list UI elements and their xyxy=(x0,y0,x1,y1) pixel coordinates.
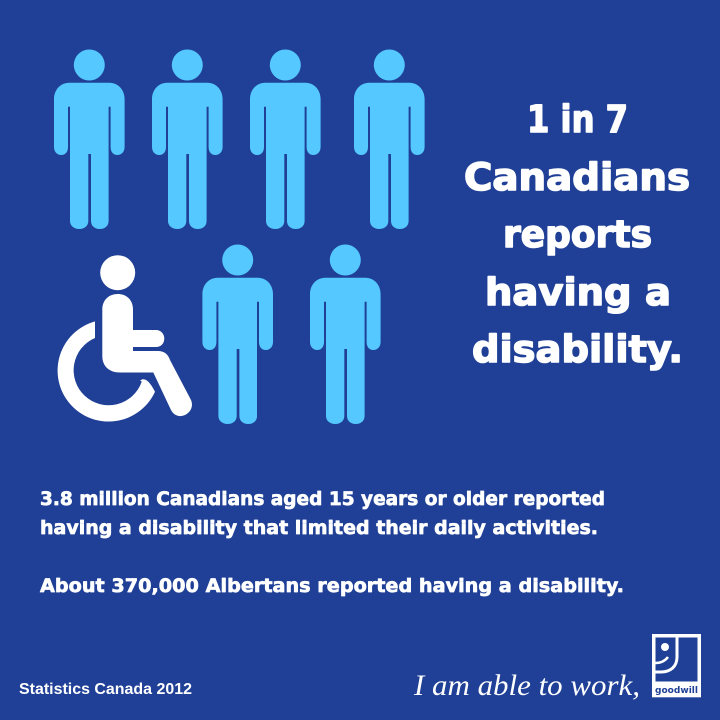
headline: Canadians xyxy=(464,156,690,199)
logo: goodwill xyxy=(652,634,701,697)
headline xyxy=(464,98,690,371)
headline: disability. xyxy=(472,328,683,371)
icon: wheelchair user xyxy=(58,255,192,422)
body text: national statistic: 3.8 million Canadians aged 15 years or older reported xyxy=(40,488,605,510)
tagline: I am able to work, xyxy=(413,669,640,702)
icon: person 4 xyxy=(354,50,425,229)
body text: national statistic: having a disability that limited their daily activities. xyxy=(40,517,598,539)
body text: national statistic xyxy=(40,488,605,539)
body text: Alberta statistic: About 370,000 Albertans reported having a disability. xyxy=(40,575,624,597)
icon: person 3 xyxy=(250,50,321,229)
headline: having a xyxy=(485,271,671,314)
source: Statistics Canada 2012 xyxy=(19,681,192,698)
icon: person 2 xyxy=(152,50,223,229)
logo: goodwill: goodwill xyxy=(655,686,698,696)
icon: person 5 xyxy=(202,244,273,424)
icon: person 1 xyxy=(54,50,125,229)
headline: reports xyxy=(503,213,652,256)
headline: 1 in 7 xyxy=(527,98,628,141)
icon: person 6 xyxy=(310,244,381,424)
